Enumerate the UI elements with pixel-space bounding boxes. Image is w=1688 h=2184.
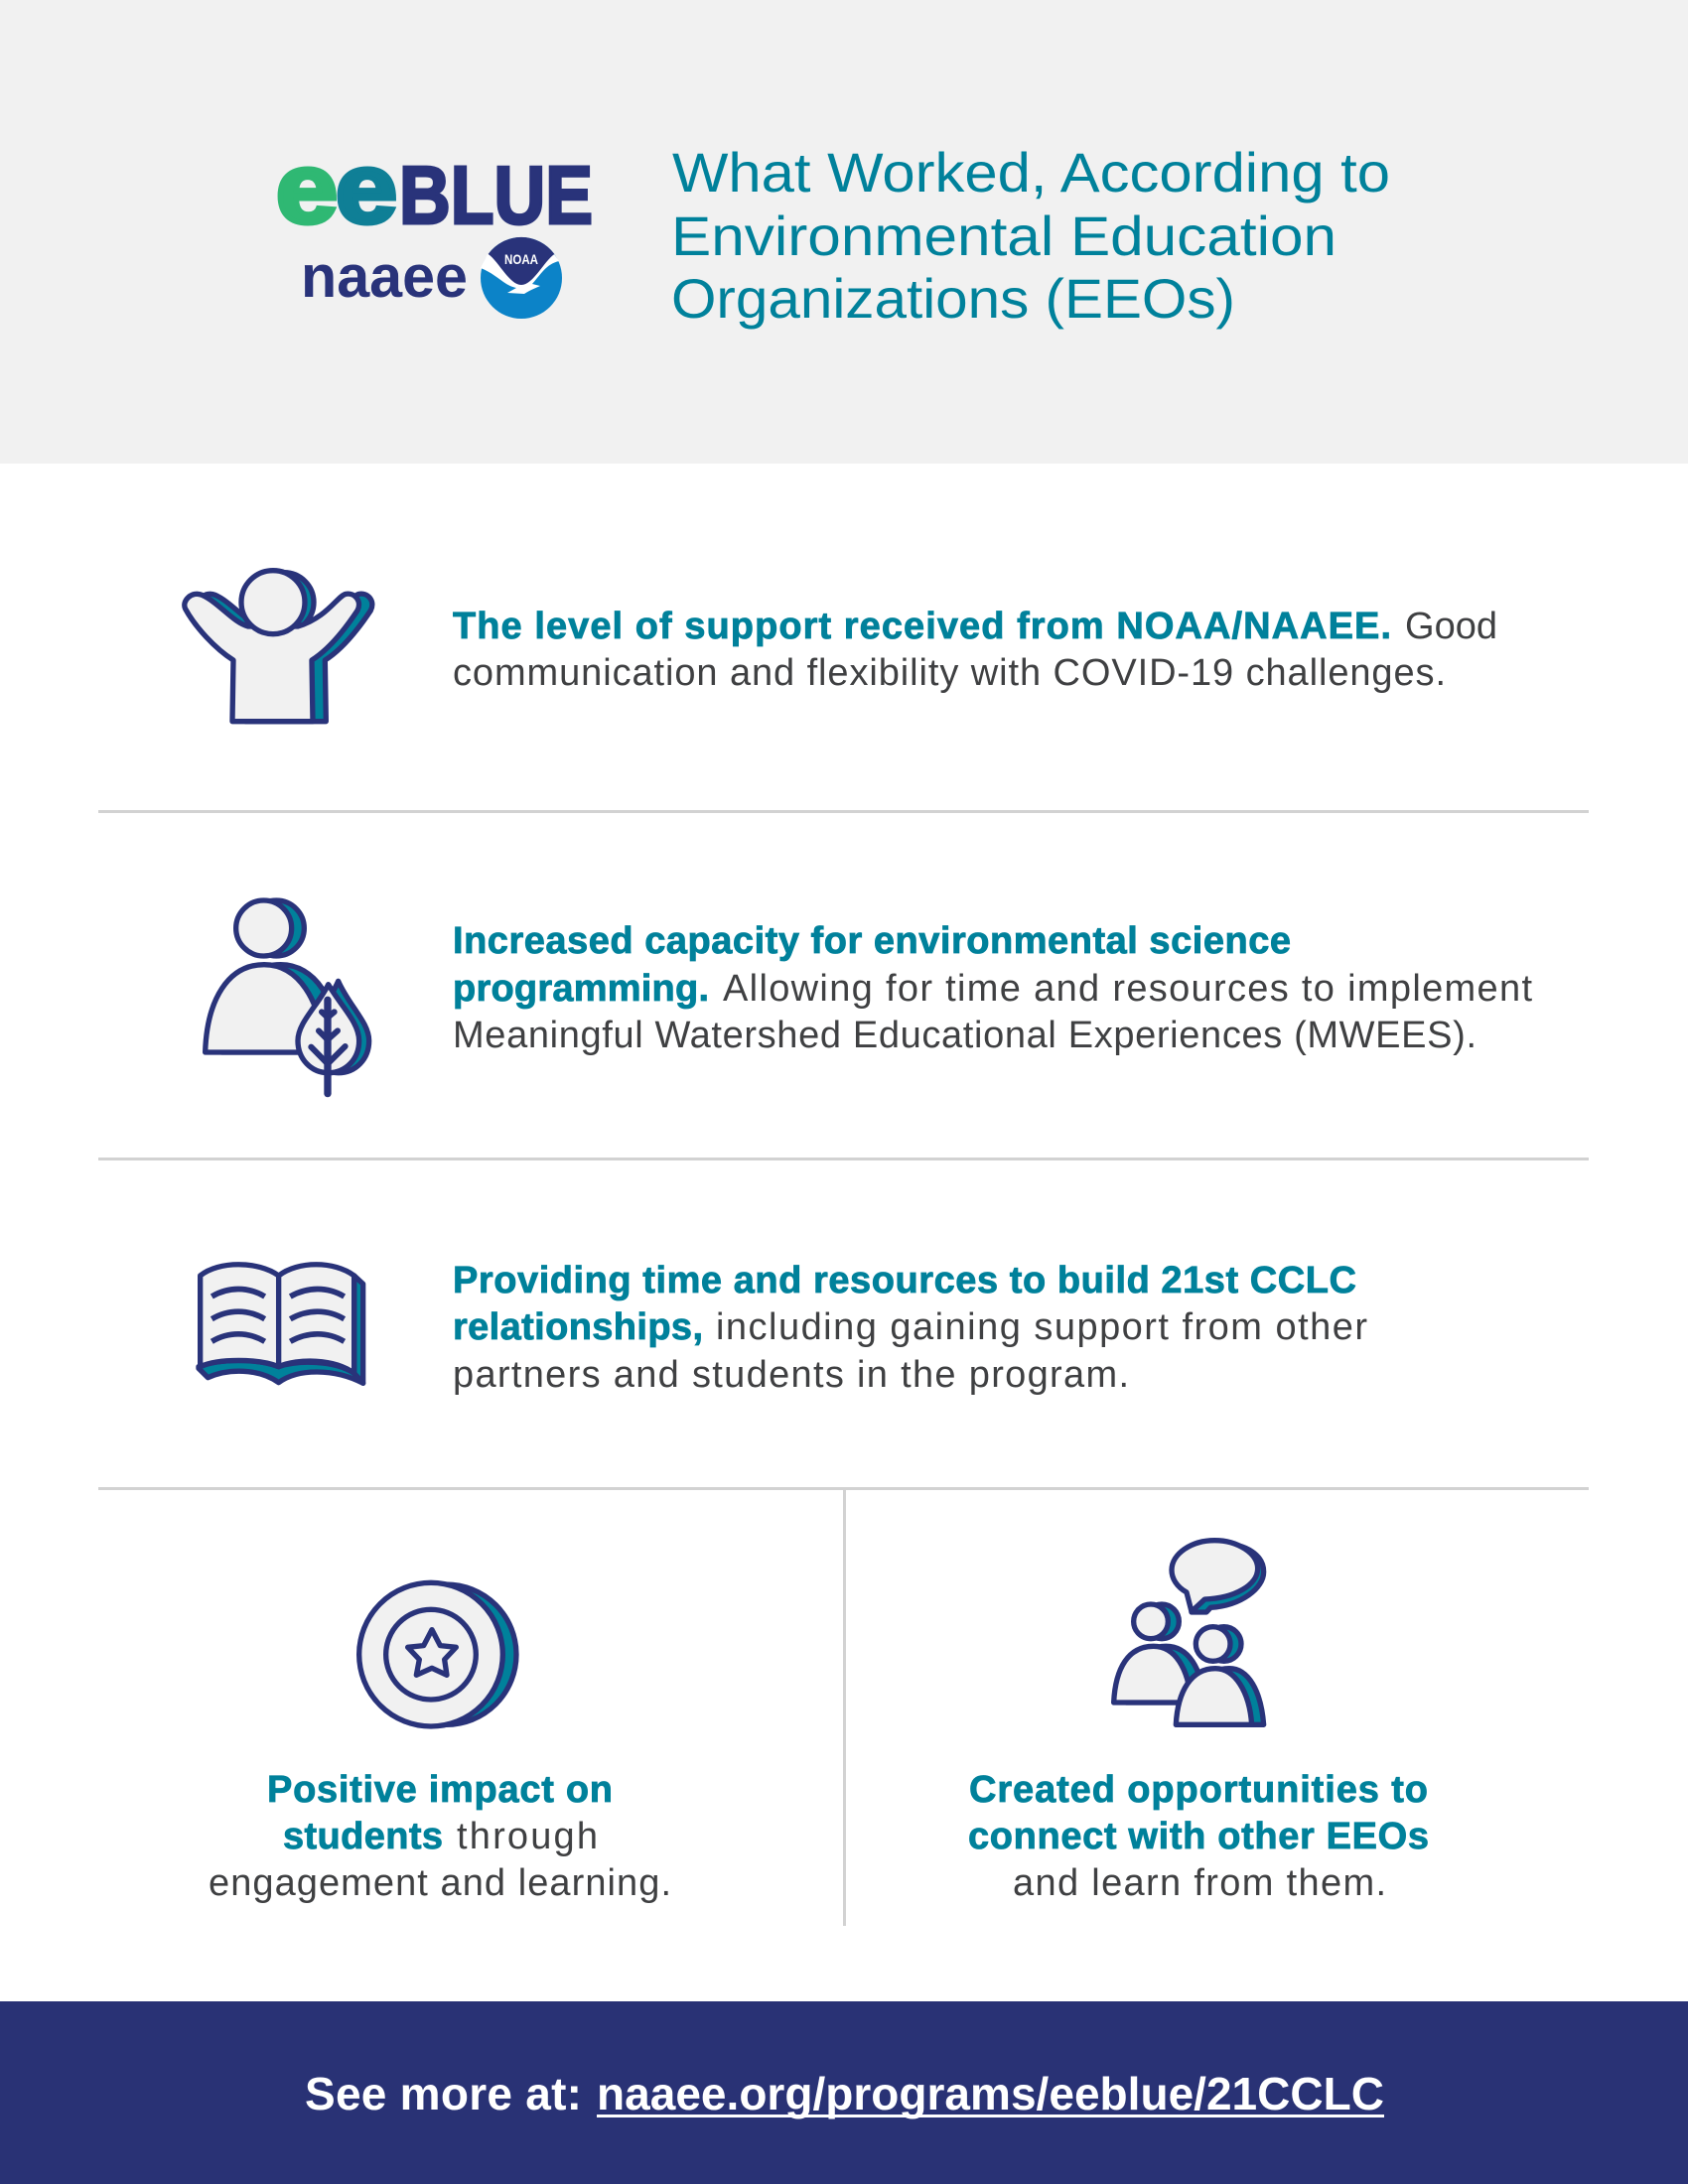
text: support received: Good (1405, 606, 1497, 647)
logo: NOAA emblem: NOAA (504, 252, 538, 267)
icon: open book (199, 1265, 363, 1383)
logo: naaee: naaee (301, 243, 468, 310)
text: positive impact (209, 1769, 671, 1904)
footer link text: See more at: (305, 2068, 582, 2119)
text: 21st CCLC relationships: including gaining support from other (716, 1306, 1367, 1348)
icon: star medal (359, 1582, 516, 1726)
text: increased capacity: programming. (453, 968, 709, 1010)
text: positive impact: Positive impact on (267, 1769, 613, 1811)
icon: person with raised arms (185, 571, 372, 722)
logo: eeBLUE (276, 133, 593, 244)
logo: eeBLUE: e (336, 133, 397, 244)
text: positive impact: engagement and learning. (209, 1862, 671, 1904)
logo: NOAA emblem (481, 237, 562, 319)
header band (0, 0, 1688, 464)
title: What Worked, According to (672, 141, 1390, 204)
text: support received (453, 606, 1497, 694)
text: increased capacity (453, 920, 1532, 1056)
text: positive impact: students (283, 1816, 443, 1857)
text: increased capacity: Meaningful Watershed Educational Experiences (MWEES). (453, 1015, 1477, 1056)
logo: eeBLUE: e (276, 133, 338, 244)
text: positive impact: through (457, 1816, 598, 1857)
icon: person with leaf (206, 900, 369, 1094)
logo: eeBLUE: BLUE (399, 149, 593, 241)
text: connect with other EEOs (968, 1769, 1429, 1904)
text: connect with other EEOs: Created opportunities to (969, 1769, 1428, 1811)
title: Organizations (EEOs) (671, 267, 1235, 330)
title: Environmental Education (671, 205, 1336, 267)
icon: two people talking (1114, 1541, 1264, 1724)
footer band (0, 2001, 1688, 2184)
title (671, 141, 1390, 330)
text: support received: The level of support received from NOAA/NAAEE. (453, 606, 1391, 647)
text: 21st CCLC relationships: partners and students in the program. (453, 1354, 1129, 1396)
text: 21st CCLC relationships: Providing time and resources to build 21st CCLC (453, 1260, 1356, 1301)
text: increased capacity: Increased capacity for environmental science (453, 920, 1291, 962)
text: 21st CCLC relationships: relationships, (453, 1306, 703, 1348)
text: connect with other EEOs: connect with other EEOs (968, 1816, 1429, 1857)
text: 21st CCLC relationships (453, 1260, 1367, 1396)
text: connect with other EEOs: and learn from them. (1013, 1862, 1386, 1904)
footer link text: naaee.org/programs/eeblue/21CCLC (597, 2068, 1384, 2119)
text: support received: communication and flexibility with COVID-19 challenges. (453, 652, 1446, 694)
text: increased capacity: Allowing for time and resources to implement (723, 968, 1532, 1010)
